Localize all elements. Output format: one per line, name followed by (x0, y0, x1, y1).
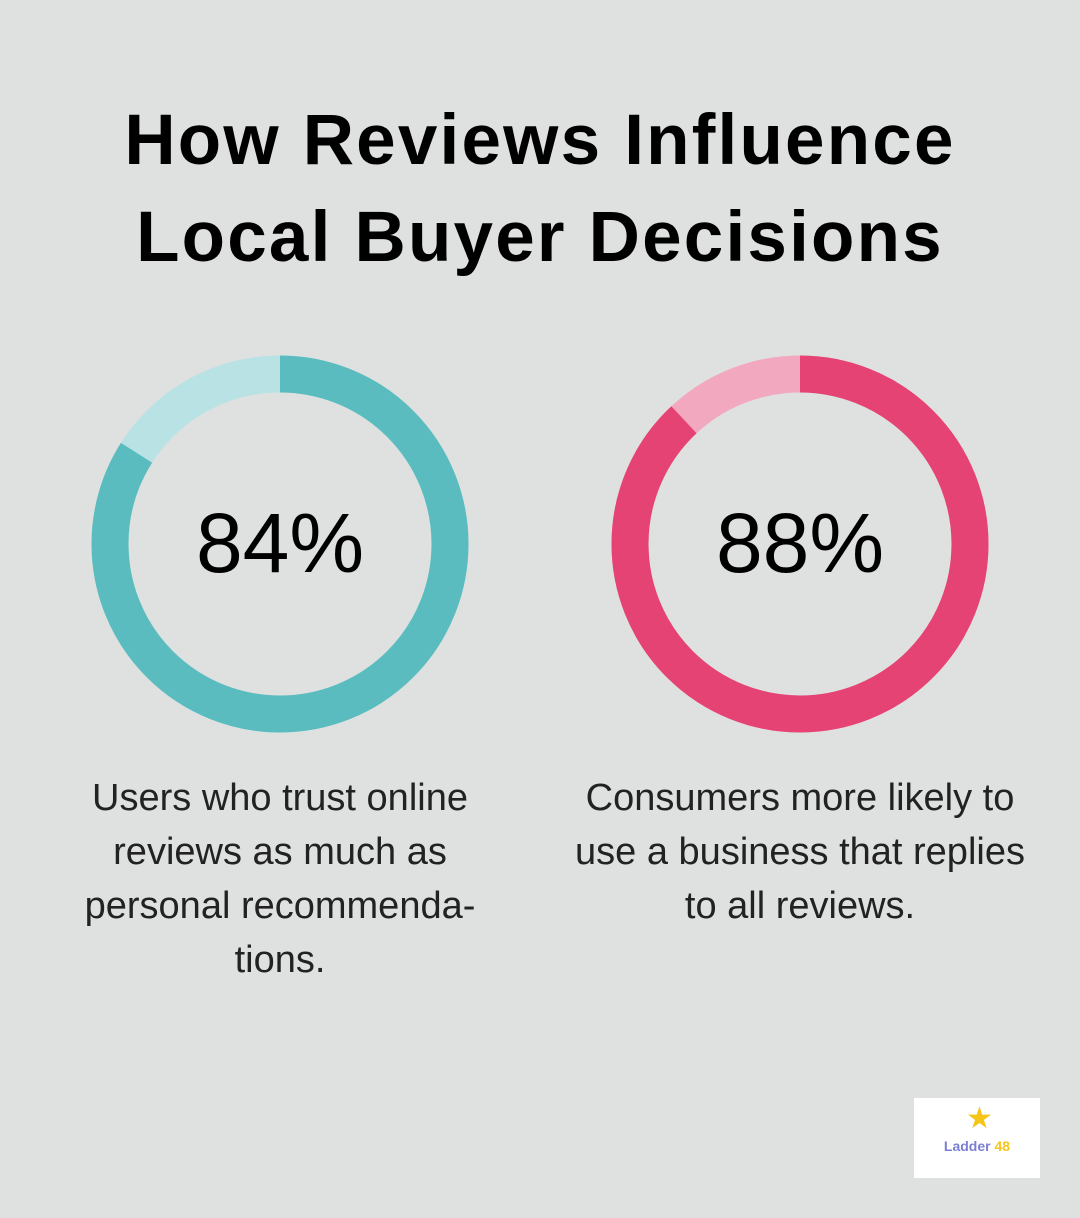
logo text: Ladder 48 (944, 1138, 1010, 1154)
stat: 84%: 84% (196, 496, 364, 590)
icon: star: ★ (966, 1102, 993, 1135)
caption right: use a business that replies (575, 831, 1025, 873)
caption left (85, 777, 475, 981)
stat: 88%: 88% (716, 496, 884, 590)
caption right: Consumers more likely to (586, 777, 1014, 819)
donut: 88% (612, 356, 988, 732)
caption left: Users who trust online (92, 777, 468, 819)
caption right: to all reviews. (685, 885, 915, 927)
caption left: reviews as much as (113, 831, 447, 873)
title: How Reviews Influence (124, 101, 956, 180)
logo (914, 1098, 1040, 1178)
title (124, 101, 956, 277)
caption right (575, 777, 1025, 927)
donut: 84% (92, 356, 468, 732)
caption left: tions. (235, 939, 325, 981)
title: Local Buyer Decisions (136, 198, 944, 277)
caption left: personal recommenda- (85, 885, 475, 927)
